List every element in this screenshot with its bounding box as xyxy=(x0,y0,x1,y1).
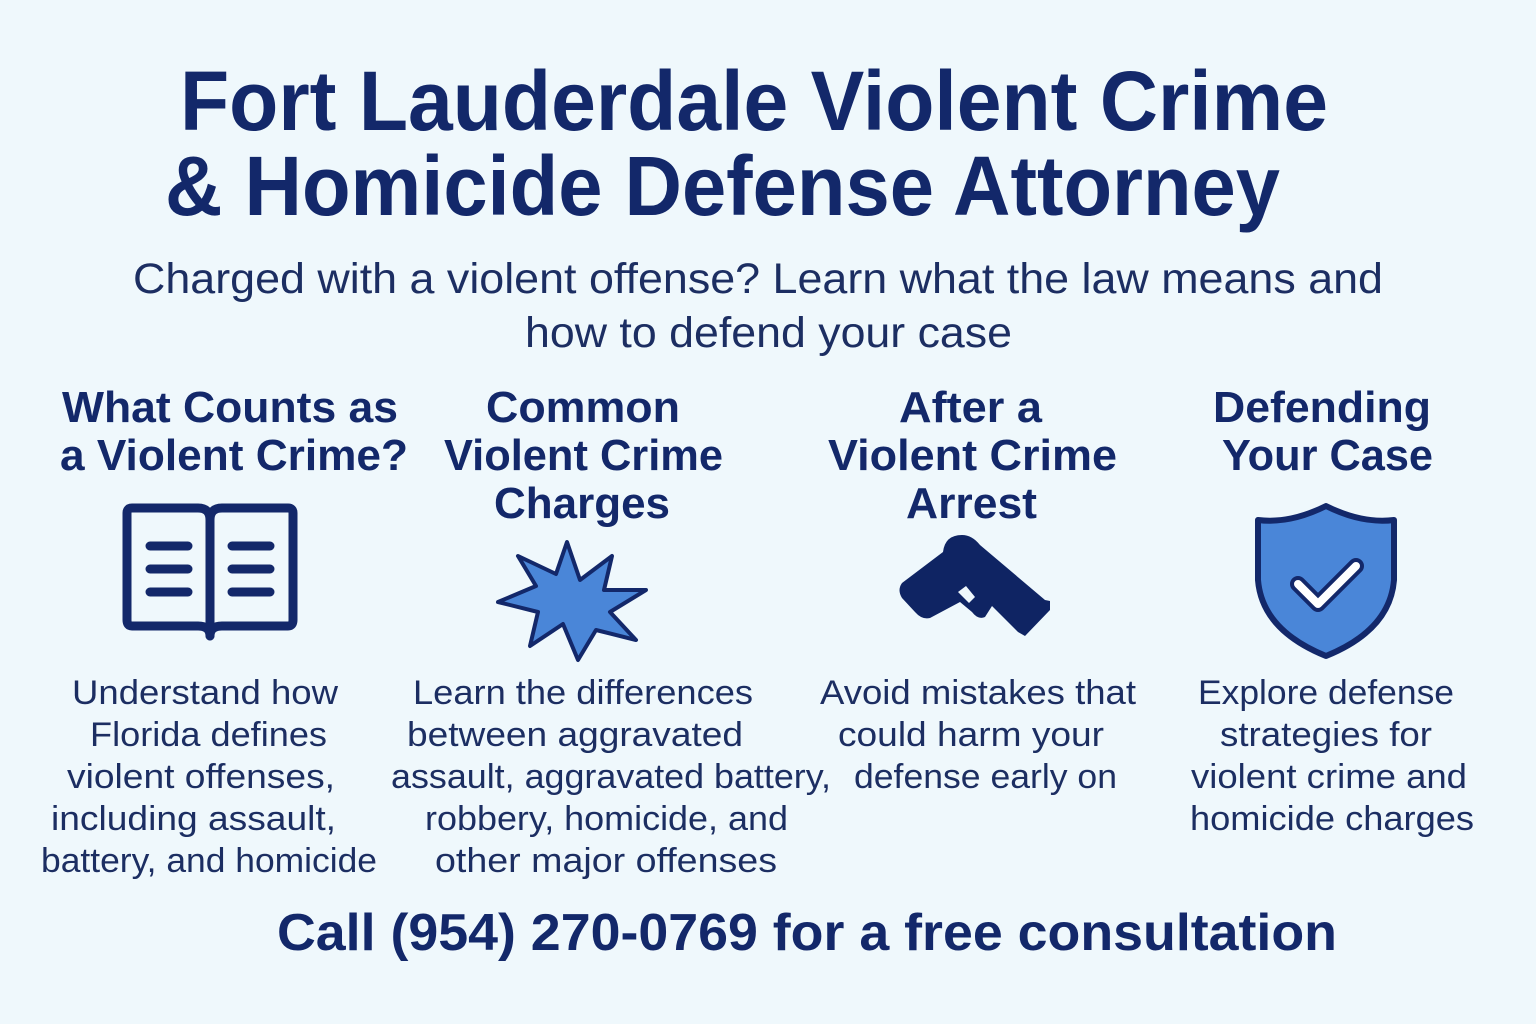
body: after arrest xyxy=(820,674,1137,796)
icon: shield xyxy=(1258,506,1394,656)
heading: common charges: Violent Crime xyxy=(444,431,723,480)
heading: common charges: Charges xyxy=(494,479,670,528)
heading: after arrest: After a xyxy=(899,383,1043,432)
body: common charges: Learn the differences xyxy=(413,674,753,712)
body: what counts xyxy=(41,674,377,880)
body: defending: Explore defense xyxy=(1198,674,1454,712)
body: after arrest: could harm your xyxy=(838,716,1104,754)
panel: after arrest xyxy=(820,383,1137,796)
body: common charges: between aggravated xyxy=(407,716,743,754)
subtitle xyxy=(133,255,1383,357)
heading: common charges xyxy=(444,383,723,528)
body: common charges xyxy=(391,674,831,880)
panel: common charges xyxy=(391,383,831,880)
panel: what counts xyxy=(41,383,408,880)
heading: defending: Defending xyxy=(1213,383,1431,432)
footer call to action: Call (954) 270-0769 for a free consultation xyxy=(277,904,1337,962)
heading: what counts xyxy=(60,383,408,480)
heading: what counts: What Counts as xyxy=(62,383,398,432)
body: what counts: Understand how xyxy=(72,674,338,712)
heading: common charges: Common xyxy=(486,383,680,432)
body: what counts: Florida defines xyxy=(90,716,327,754)
title: Fort Lauderdale Violent Crime xyxy=(180,54,1328,148)
heading: defending xyxy=(1213,383,1433,480)
heading: after arrest: Arrest xyxy=(906,479,1037,528)
heading: after arrest: Violent Crime xyxy=(828,431,1117,480)
body: common charges: robbery, homicide, and xyxy=(425,800,788,838)
title: & Homicide Defense Attorney xyxy=(165,139,1280,233)
body: after arrest: defense early on xyxy=(854,758,1117,796)
subtitle: Charged with a violent offense? Learn what the law means and xyxy=(133,255,1383,303)
heading: what counts: a Violent Crime? xyxy=(60,431,408,480)
heading: after arrest xyxy=(828,383,1117,528)
body: defending: homicide charges xyxy=(1190,800,1474,838)
body: common charges: other major offenses xyxy=(435,842,777,880)
body: defending: strategies for xyxy=(1220,716,1432,754)
body: common charges: assault, aggravated battery, xyxy=(391,758,831,796)
title xyxy=(165,54,1328,233)
heading: defending: Your Case xyxy=(1222,431,1433,480)
body: what counts: including assault, xyxy=(51,800,336,838)
icon: gun xyxy=(900,535,1050,636)
icon: book xyxy=(127,508,293,636)
body: what counts: battery, and homicide xyxy=(41,842,377,880)
body: defending xyxy=(1190,674,1474,838)
body: defending: violent crime and xyxy=(1191,758,1467,796)
panel: defending xyxy=(1190,383,1474,838)
icon: starburst xyxy=(498,542,646,660)
body: what counts: violent offenses, xyxy=(67,758,335,796)
subtitle: how to defend your case xyxy=(525,309,1012,357)
body: after arrest: Avoid mistakes that xyxy=(820,674,1137,712)
